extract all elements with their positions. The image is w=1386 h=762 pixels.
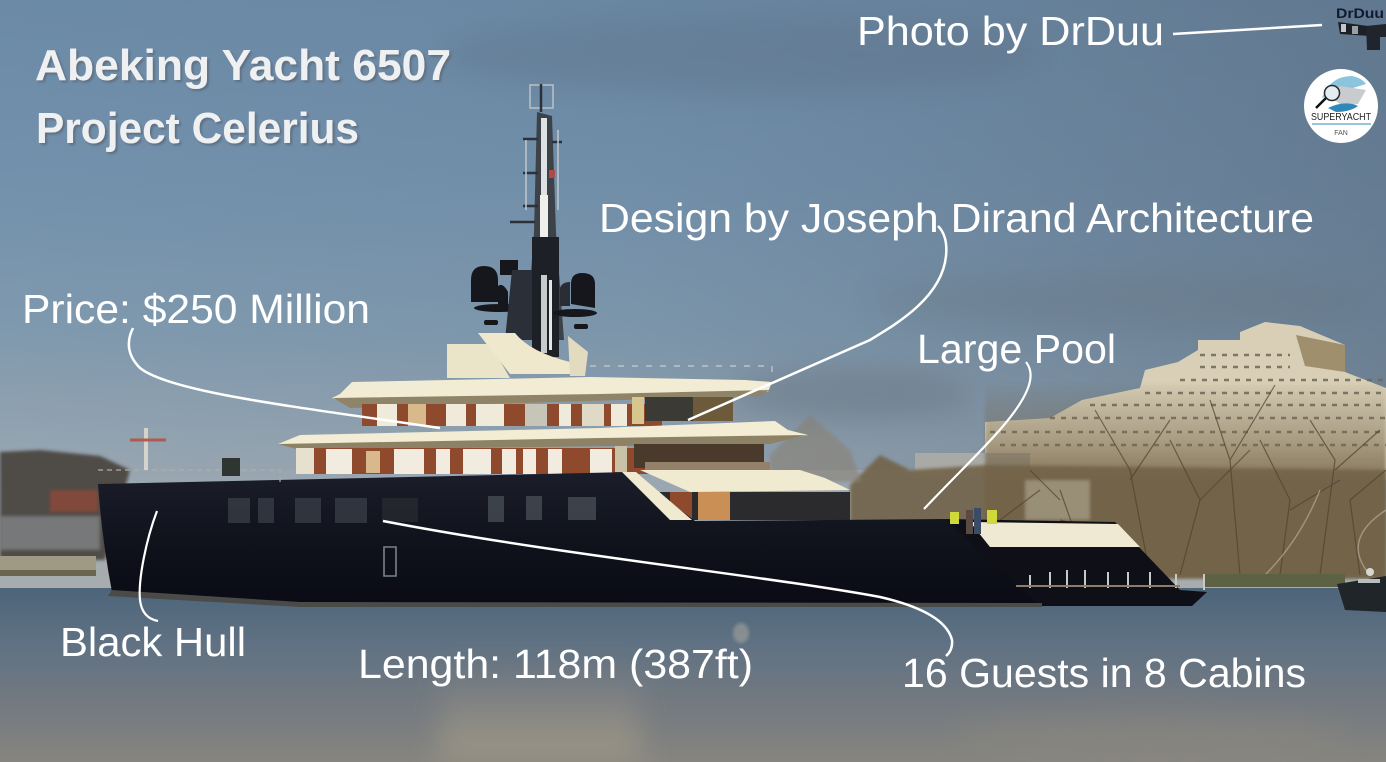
hull [98, 472, 1042, 605]
bow railing and mast [98, 428, 280, 484]
title [35, 41, 451, 153]
background: left shoreline [0, 450, 130, 576]
sun-lit stairs [622, 472, 692, 520]
icon: Superyacht Fan logo: FAN [1334, 130, 1348, 137]
callout: design: Design by Joseph Dirand Architecture [599, 195, 1314, 241]
lower aft deck [640, 470, 850, 520]
upper deck [332, 377, 772, 426]
callout: black hull: Black Hull [60, 619, 246, 665]
stern section [945, 508, 1207, 606]
callout: guests and cabins [383, 521, 1306, 696]
mast [510, 84, 564, 357]
icon: DrDuu camera logo [1336, 5, 1386, 50]
reflection band [108, 590, 1042, 607]
credit: Photo by DrDuu [857, 8, 1322, 54]
background: right shore, buildings and trees [770, 322, 1386, 587]
icon: Superyacht Fan logo [1304, 69, 1378, 143]
callout: price: Price: $250 Million [22, 286, 370, 332]
callout: length: Length: 118m (387ft) [358, 641, 753, 687]
middle deck [278, 421, 808, 474]
icon: DrDuu camera logo: DrDuu [1336, 5, 1384, 21]
radar domes [471, 260, 597, 340]
credit: Photo by DrDuu: Photo by DrDuu [857, 8, 1164, 54]
callout: large pool: Large Pool [917, 326, 1116, 372]
title: Project Celerius [36, 104, 359, 153]
callout: large pool [917, 326, 1116, 509]
top deck structure [447, 333, 772, 380]
callout: black hull [60, 511, 246, 665]
callout: price [22, 286, 440, 428]
hull windows [228, 496, 596, 523]
background: sky [0, 0, 1386, 600]
tugboat [1337, 568, 1386, 612]
background: water [0, 588, 1386, 762]
title: Abeking Yacht 6507 [35, 41, 451, 90]
icon: Superyacht Fan logo: SUPERYACHT [1311, 112, 1371, 123]
callout: guests and cabins: 16 Guests in 8 Cabins [902, 650, 1306, 696]
yacht [98, 84, 1207, 607]
callout: design [599, 195, 1314, 420]
